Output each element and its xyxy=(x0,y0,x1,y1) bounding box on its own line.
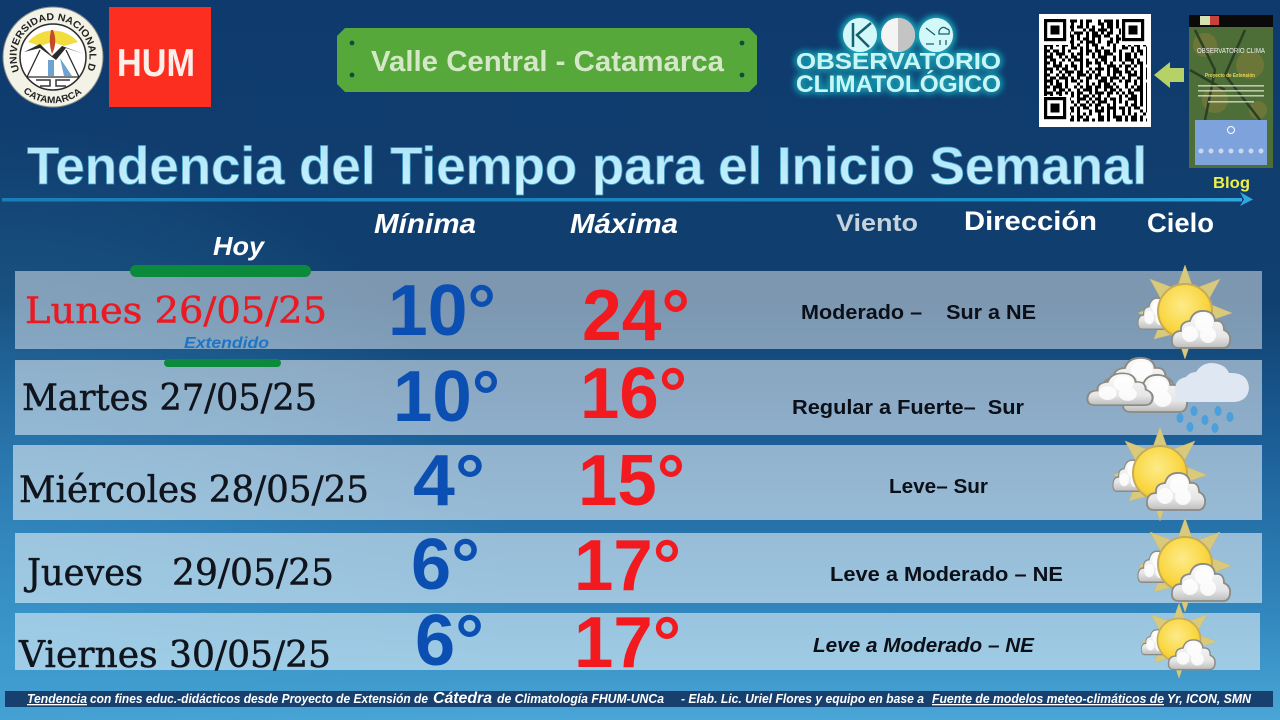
icon: sun and cloud, Miércoles xyxy=(1113,427,1207,521)
logo: Universidad Nacional de Catamarca xyxy=(2,6,104,108)
date: Martes: Martes 27/05/25 xyxy=(22,378,317,419)
footer bar: - Elab. Lic. Uriel Flores y equipo en base a xyxy=(681,691,924,706)
maximum: Miércoles: 15° xyxy=(578,441,685,521)
wind: Viernes: Leve a Moderado – NE xyxy=(813,635,1035,657)
footer bar: Tendencia xyxy=(27,691,87,706)
minimum: Miércoles: 4° xyxy=(413,441,485,521)
footer bar: Fuente de modelos meteo-climáticos de xyxy=(932,691,1164,706)
QR code xyxy=(1039,14,1151,127)
minimum: Jueves: 6° xyxy=(411,525,480,605)
wind: Lunes: Moderado – Sur a NE xyxy=(801,302,1036,324)
blog label: Blog xyxy=(1213,175,1250,192)
maximum: Viernes: 17° xyxy=(574,603,681,683)
wind: Miércoles: Leve– Sur xyxy=(889,476,988,498)
icon: sun and cloud, Lunes xyxy=(1138,265,1232,359)
logo: Observatorio Climatológico: CLIMATOLÓGICO xyxy=(796,70,1001,98)
column heading: Dirección: Dirección xyxy=(964,206,1097,236)
minimum: Martes: 10° xyxy=(393,357,500,437)
logo: HUM: HUM xyxy=(117,42,195,85)
panel: Jueves row xyxy=(15,533,1262,603)
icon: sun and cloud, Jueves xyxy=(1138,518,1232,612)
icon: clouds and rain, Martes xyxy=(1087,358,1249,433)
column heading: Cielo: Cielo xyxy=(1147,208,1214,238)
minimum: Lunes: 10° xyxy=(388,271,496,351)
maximum: Martes: 16° xyxy=(580,354,687,434)
date: Jueves: Jueves xyxy=(23,553,143,594)
date: Lunes: Lunes 26/05/25 xyxy=(25,291,327,332)
logo: Observatorio Climatológico: OBSERVATORIO xyxy=(796,48,1001,74)
region sign: Valle Central - Catamarca xyxy=(337,28,757,92)
column heading: Hoy: Hoy xyxy=(213,231,266,261)
title: Tendencia del Tiempo para el Inicio Semanal xyxy=(27,137,1147,196)
maximum: Jueves: 17° xyxy=(574,526,681,606)
footer bar xyxy=(5,690,1273,707)
region sign: Valle Central - Catamarca: Valle Central - Catamarca xyxy=(371,46,725,78)
title arrow line xyxy=(2,192,1253,206)
arrow: blog to QR xyxy=(1154,62,1184,88)
column heading: Máxima: Máxima xyxy=(570,208,678,239)
wind: Martes: Regular a Fuerte– Sur xyxy=(792,397,1024,419)
footer bar: Cátedra xyxy=(433,690,492,707)
blog screenshot: Proyecto de Extensión xyxy=(1205,73,1256,79)
date: Viernes: Viernes 30/05/25 xyxy=(18,635,331,676)
date: Miércoles: Miércoles 28/05/25 xyxy=(19,470,369,511)
panel: Viernes row xyxy=(15,613,1260,670)
panel: Miércoles row xyxy=(13,445,1262,520)
icon: sun and cloud, Viernes xyxy=(1141,603,1217,678)
date: Jueves xyxy=(23,553,334,594)
label: Extendido: Extendido xyxy=(184,335,269,352)
panel: Lunes row xyxy=(15,271,1262,349)
logo: HUM xyxy=(109,7,211,107)
logo: Observatorio Climatológico xyxy=(796,18,1001,98)
date: Jueves: 29/05/25 xyxy=(172,553,334,594)
wind: Jueves: Leve a Moderado – NE xyxy=(830,564,1063,586)
blog screenshot xyxy=(1189,15,1273,168)
highlight bar: Extendido xyxy=(164,359,281,367)
column heading: Viento: Viento xyxy=(836,210,918,237)
footer bar: Yr, ICON, SMN xyxy=(1167,691,1252,706)
blog screenshot: OBSERVATORIO CLIMA xyxy=(1197,48,1265,55)
panel: Martes row xyxy=(15,360,1262,435)
minimum: Viernes: 6° xyxy=(415,601,484,681)
maximum: Lunes: 24° xyxy=(582,276,690,356)
footer bar: con fines educ.-didácticos desde Proyecto de Extensión de xyxy=(90,691,428,706)
logo: Universidad Nacional de Catamarca: CATAMARCA xyxy=(24,88,82,104)
footer bar: de Climatología FHUM-UNCa xyxy=(497,691,664,706)
column heading: Mínima: Mínima xyxy=(374,208,476,239)
highlight bar: Hoy xyxy=(130,265,311,277)
